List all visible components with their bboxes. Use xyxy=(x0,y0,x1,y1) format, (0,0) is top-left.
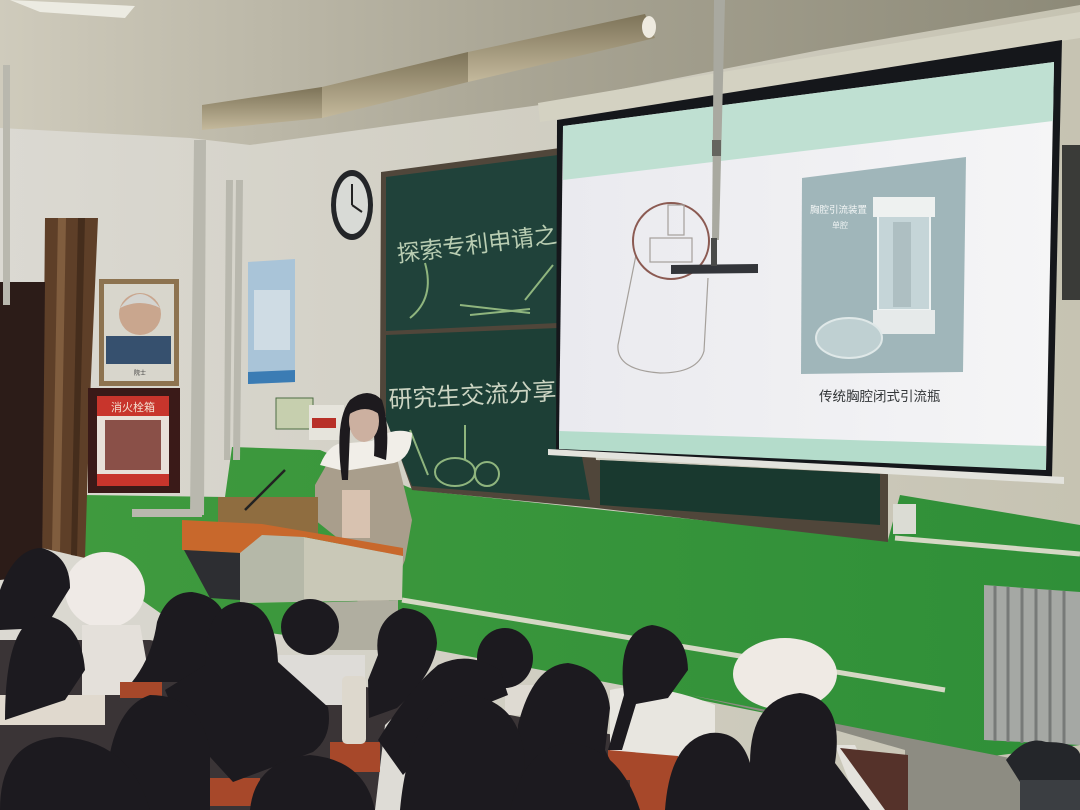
portrait frame xyxy=(99,279,179,386)
ceiling light fixture xyxy=(202,14,656,130)
slide sketch of bottle xyxy=(618,203,709,373)
slide top band xyxy=(563,62,1054,180)
podium xyxy=(182,470,403,650)
chalkboard xyxy=(380,148,888,542)
ceiling xyxy=(0,0,1080,145)
audience xyxy=(0,548,908,810)
notice poster xyxy=(248,259,295,384)
photo caption: 胸腔引流装置 xyxy=(810,204,867,216)
projection screen xyxy=(548,40,1064,484)
desks xyxy=(120,682,678,810)
small sign xyxy=(276,398,344,440)
radiator xyxy=(984,585,1080,746)
green lower wall xyxy=(85,447,1080,757)
fire notice board xyxy=(88,388,180,493)
audience base xyxy=(0,640,700,810)
wall rails xyxy=(402,538,1080,690)
chalk plants xyxy=(410,263,553,486)
projector pole xyxy=(671,0,758,274)
fire notice board: 消火栓箱 xyxy=(111,400,155,414)
portrait frame: 院士 xyxy=(134,369,146,377)
back row left xyxy=(0,548,70,630)
slide photo panel xyxy=(801,157,966,374)
ceiling lamp strip xyxy=(10,0,135,18)
plant pot xyxy=(1006,740,1080,810)
projector mount rail xyxy=(538,12,1080,122)
slide bottom band xyxy=(559,431,1046,470)
chalk heading bottom: 研究生交流分享 xyxy=(388,378,557,414)
dark hair and clothes xyxy=(0,548,870,810)
projection screen: 单腔 xyxy=(832,220,848,230)
floor xyxy=(690,695,1020,810)
bottle on desk xyxy=(342,676,366,744)
chalk heading top: 探索专利申请之路 xyxy=(395,219,581,267)
drain pipes xyxy=(3,65,243,517)
curtain xyxy=(42,218,98,558)
hats and hoods xyxy=(65,552,145,628)
right wall panel xyxy=(1062,145,1080,300)
slide caption: 传统胸腔闭式引流瓶 xyxy=(819,389,940,404)
door xyxy=(0,282,45,580)
speaker xyxy=(315,393,412,650)
drainage bottle xyxy=(816,197,935,358)
white jackets xyxy=(82,625,148,695)
clock xyxy=(331,170,373,240)
screen bottom bar xyxy=(548,449,1064,484)
switch box xyxy=(893,504,916,534)
